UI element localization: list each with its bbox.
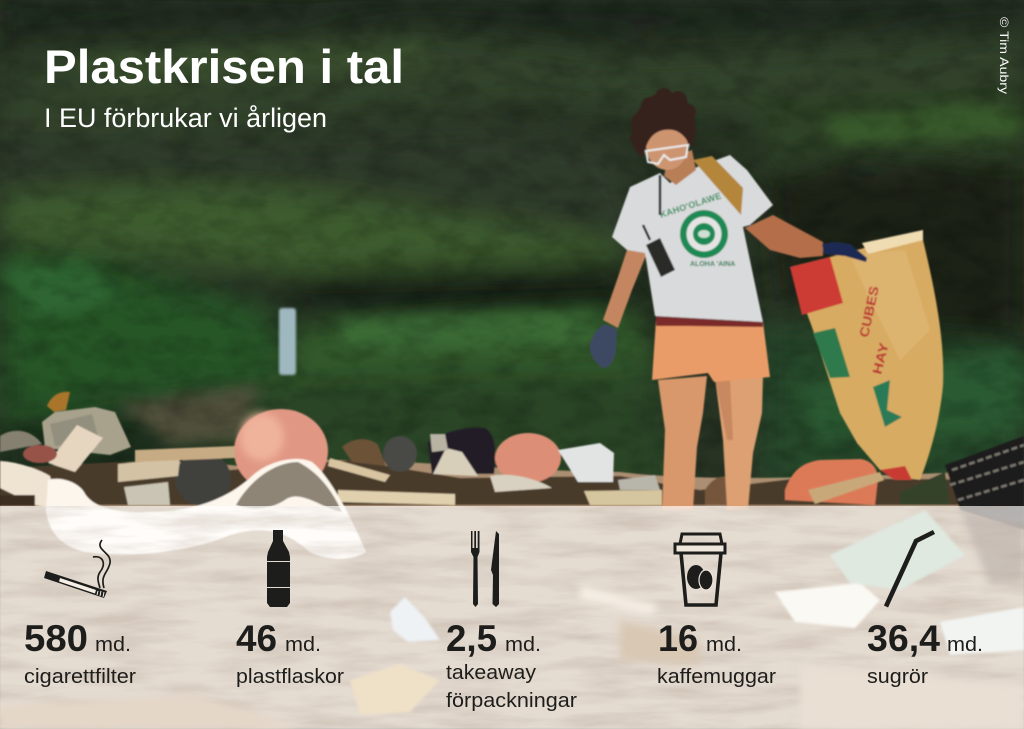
gloves: [590, 324, 617, 368]
stat: plastic bottles: [236, 530, 344, 688]
value: 2,5 md.: 2,5: [446, 618, 497, 659]
translucent white panel over the lower photo: [0, 506, 1024, 729]
stat: cigarette filters: [24, 540, 136, 688]
t-shirt: [612, 155, 773, 322]
sack: [790, 230, 943, 480]
stat: coffee cups: md.: [706, 634, 742, 656]
value: 46 md.: 46: [236, 618, 277, 659]
stat: straws: [867, 532, 983, 688]
icon: bottle: [267, 530, 290, 607]
label: sugrör: sugrör: [867, 666, 928, 688]
icon: fork and knife: [471, 531, 499, 607]
stat: takeaway packaging: [446, 531, 577, 712]
icon: straw: [886, 532, 934, 606]
stat: takeaway packaging: förpackningar: [446, 690, 577, 712]
label: kaffemuggar: kaffemuggar: [657, 666, 776, 688]
value: 16 md.: 16: [658, 618, 698, 659]
value: 36,4 md.: 36,4: [867, 618, 940, 659]
right arm: [745, 215, 823, 258]
stat: coffee cups: [657, 534, 776, 688]
stat: cigarette filters: md.: [95, 634, 131, 656]
value: 580 md.: 580: [24, 618, 88, 659]
photo: woman collecting waste with a sack: [590, 88, 943, 510]
legs: [658, 376, 707, 510]
stat: straws: md.: [947, 634, 983, 656]
label: plastflaskor: plastflaskor: [236, 666, 344, 688]
subtitle: I EU förbrukar vi årligen: [44, 103, 327, 133]
icon: coffee cup: [675, 534, 725, 605]
photo: beach debris and driftwood: [0, 392, 1024, 729]
shorts: [652, 320, 770, 382]
background photo: green hillside: [0, 0, 1024, 510]
stat: takeaway packaging: md.: [505, 634, 541, 656]
photo credit: © Tim Aubry: [997, 17, 1011, 94]
lanyard and radio: [643, 175, 660, 240]
photo: woman collecting waste with a sack: ALOHA 'AINA: [690, 261, 735, 268]
left arm: [603, 250, 647, 328]
glasses: [646, 145, 688, 164]
photo: woman collecting waste with a sack: HAY: [869, 341, 892, 376]
t-shirt text: KAHO'OLAWE: [659, 191, 722, 220]
title: Plastkrisen i tal: [44, 40, 404, 93]
icon: cigarette with smoke: [44, 540, 110, 598]
hair: [630, 88, 696, 156]
neck and face: [664, 150, 696, 185]
label: takeaway förpackningar: takeaway: [446, 662, 536, 684]
label: cigarettfilter: cigarettfilter: [24, 666, 136, 688]
sack text: CUBES: [856, 284, 882, 339]
stat: plastic bottles: md.: [285, 634, 321, 656]
